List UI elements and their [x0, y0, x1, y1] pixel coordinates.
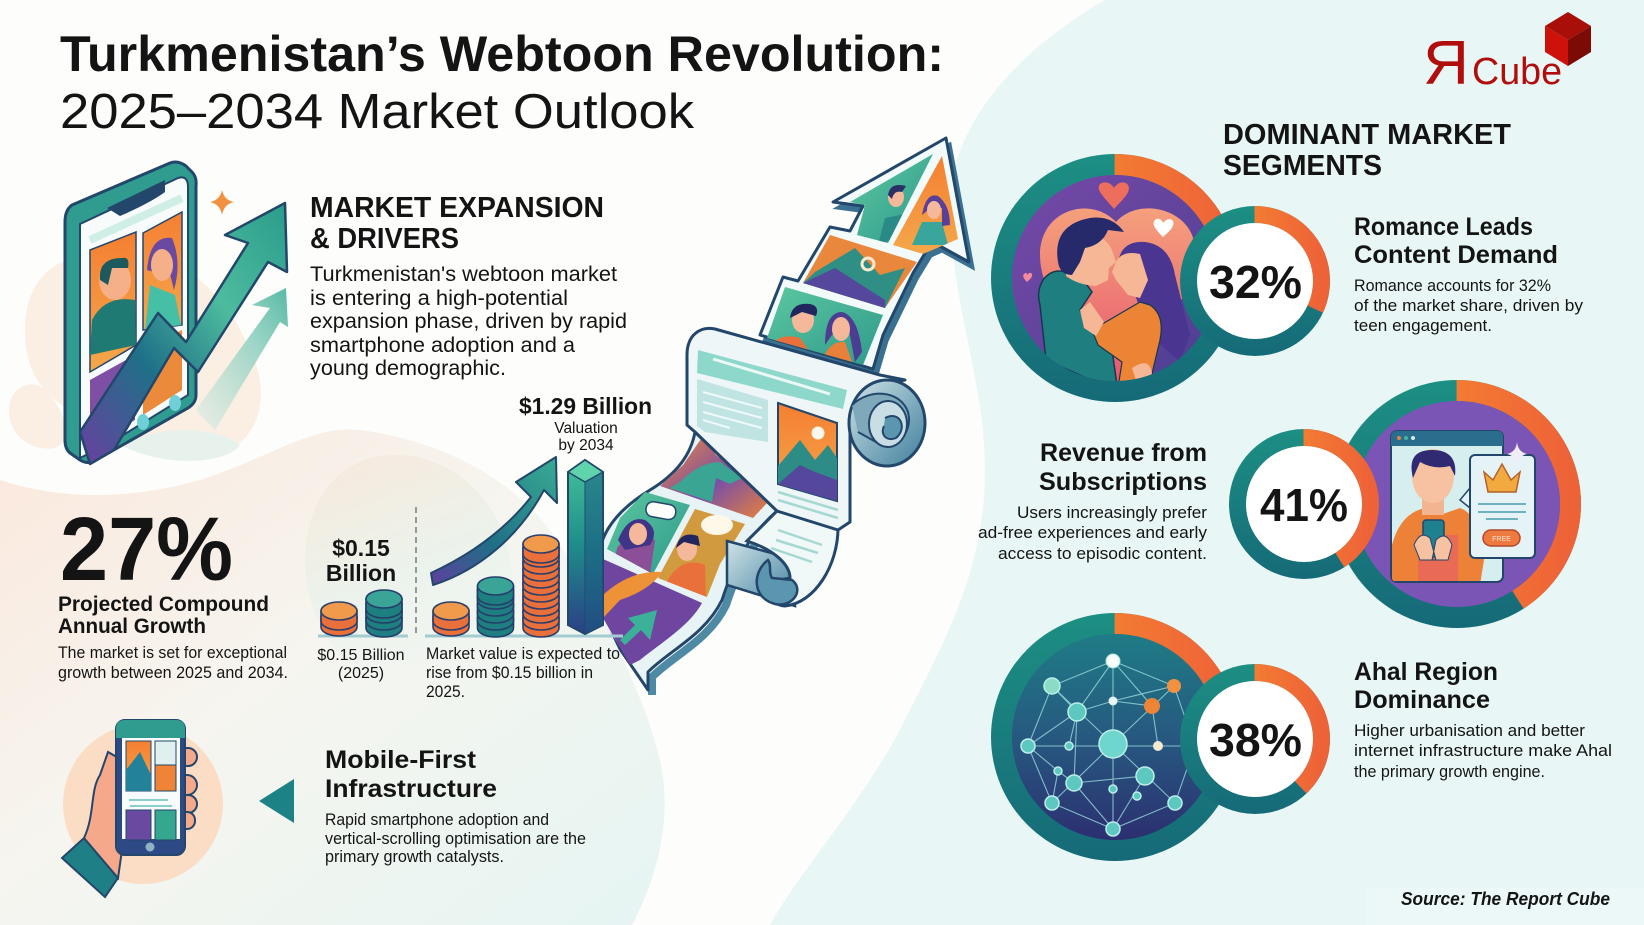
panel: market expansion and drivers: & DRIVERS	[310, 223, 459, 255]
text: subscriptions	[978, 439, 1208, 563]
2034 label: Valuation	[554, 420, 618, 437]
2034 label: $1.29 Billion	[519, 393, 652, 419]
chart: 2025 coins: $0.15 Billion	[317, 647, 405, 664]
body text: Turkmenistan's webtoon market	[310, 262, 617, 286]
growth arrow main	[80, 203, 287, 464]
logo	[1423, 12, 1591, 98]
text: subscriptions: Subscriptions	[1039, 468, 1207, 496]
panel: mobile-first infrastructure	[325, 746, 586, 866]
phone body	[65, 162, 196, 462]
icon: phone with growth arrows	[9, 162, 288, 464]
panel: 27 percent growth stat: Annual Growth	[58, 615, 206, 638]
text: ahal: the primary growth engine.	[1354, 763, 1545, 781]
text: subscriptions: ad-free experiences and early	[978, 524, 1208, 542]
text: subscriptions: access to episodic content.	[998, 545, 1207, 563]
chart: 2025 coins: (2025)	[338, 665, 384, 682]
logo: Я	[1423, 29, 1469, 98]
icon: hand holding phone	[62, 720, 223, 897]
phone	[116, 720, 185, 855]
segment: romance	[991, 154, 1584, 402]
38 percent ring: 38%	[1209, 714, 1302, 766]
segment: ahal region	[991, 613, 1612, 861]
32 percent ring: 32%	[1209, 256, 1302, 308]
text: romance	[1354, 213, 1584, 335]
caption	[426, 645, 620, 701]
large ring with subscriber illustration: FREE	[1492, 536, 1511, 543]
text: ahal: Dominance	[1354, 686, 1490, 714]
panel: mobile-first infrastructure: primary growth catalysts.	[325, 848, 504, 866]
41 percent ring	[1229, 429, 1379, 579]
chart: 2025 coins: $0.15	[332, 535, 390, 561]
woman	[1112, 253, 1148, 298]
icon: red cube	[1545, 12, 1591, 66]
title: Turkmenistan’s Webtoon Revolution:	[60, 26, 944, 82]
heading: dominant market segments: DOMINANT MARKET	[1223, 119, 1511, 151]
41 percent ring: 41%	[1260, 479, 1348, 531]
panel: mobile-first infrastructure: vertical-scrolling optimisation are the	[325, 830, 586, 848]
panel: 27 percent growth stat: Projected Compound	[58, 593, 269, 616]
comic characters	[90, 258, 136, 355]
heading: dominant market segments	[1223, 119, 1511, 182]
fingers	[175, 748, 197, 829]
caption: 2025.	[426, 683, 465, 701]
32 percent ring	[1180, 206, 1330, 356]
2034 label: by 2034	[558, 437, 614, 454]
title	[60, 26, 944, 139]
panel: mobile-first infrastructure: Mobile-First	[325, 746, 477, 774]
caption: Market value is expected to	[426, 645, 620, 663]
segment: subscriptions	[978, 380, 1581, 628]
panel: 27 percent growth stat: The market is set for exceptional	[58, 644, 287, 662]
text: romance: Romance accounts for 32%	[1354, 277, 1551, 295]
growth curve arrow	[431, 457, 557, 585]
background: lower-left panel	[0, 429, 665, 925]
text: romance: Content Demand	[1354, 241, 1558, 269]
central scroll illustration	[600, 138, 973, 695]
paper roll	[849, 380, 925, 466]
38 percent ring	[1180, 664, 1330, 814]
body text	[310, 262, 627, 380]
text: subscriptions: Revenue from	[1040, 439, 1207, 467]
panel: mobile-first infrastructure: Rapid smartphone adoption and	[325, 811, 549, 829]
text: subscriptions: Users increasingly prefer	[1017, 504, 1208, 522]
cuff	[62, 838, 118, 897]
2034 value bar	[568, 460, 603, 634]
woman hair	[1118, 242, 1190, 362]
2034 label	[519, 393, 652, 454]
text: romance: Romance Leads	[1354, 213, 1533, 241]
panel: market expansion and drivers: MARKET EXPANSION	[310, 192, 604, 224]
panel: 27 percent growth stat: growth between 2025 and 2034.	[58, 664, 288, 682]
arrow: left triangle	[259, 779, 294, 823]
panel: market expansion and drivers	[310, 192, 627, 380]
text: romance: of the market share, driven by	[1354, 297, 1584, 315]
body text: expansion phase, driven by rapid	[310, 309, 627, 333]
chart: 2025 coins	[317, 535, 408, 682]
growth arrow light	[196, 288, 288, 430]
large ring with network illustration	[991, 613, 1239, 861]
panel: 27 percent growth stat	[58, 500, 288, 682]
text: ahal	[1354, 658, 1612, 781]
body text: is entering a high-potential	[310, 286, 568, 310]
source note	[1366, 888, 1644, 925]
text: ahal: Higher urbanisation and better	[1354, 722, 1586, 740]
text: romance: teen engagement.	[1354, 317, 1492, 335]
rising comic strip arrow	[760, 138, 973, 375]
panel: mobile-first infrastructure: Infrastructure	[325, 775, 497, 803]
newspaper page	[687, 328, 905, 530]
title: 2025–2034 Market Outlook	[60, 85, 695, 139]
bottom paper curl	[727, 511, 838, 606]
peach blobs	[9, 257, 261, 461]
logo: Cube	[1472, 51, 1562, 93]
background: right mint panel	[770, 0, 1644, 925]
body text: smartphone adoption and a	[310, 333, 575, 357]
background: chart blob	[305, 455, 516, 700]
coin stacks	[433, 535, 559, 637]
man	[1039, 271, 1118, 392]
large ring with subscriber illustration	[1333, 380, 1581, 628]
text: ahal: Ahal Region	[1354, 658, 1498, 686]
chart: growth to 2034	[425, 393, 652, 701]
panel: 27 percent growth stat: 27%	[60, 500, 233, 600]
text: ahal: internet infrastructure make Ahal	[1354, 742, 1612, 760]
lower comic strip	[600, 432, 781, 695]
icon: orange sparkle	[210, 190, 234, 215]
heading: dominant market segments: SEGMENTS	[1223, 150, 1382, 182]
body text: young demographic.	[310, 356, 506, 380]
large ring with couple illustration	[991, 154, 1239, 402]
chart: 2025 coins: Billion	[326, 560, 396, 586]
caption: rise from $0.15 billion in	[426, 664, 593, 682]
source note: Source: The Report Cube	[1401, 889, 1610, 909]
